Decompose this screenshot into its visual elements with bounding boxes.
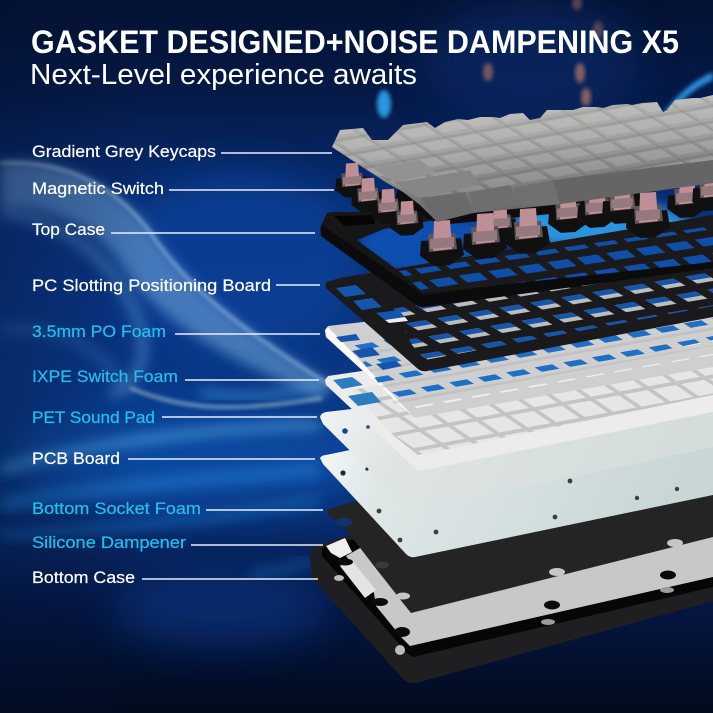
- silicone dampener: [326, 470, 713, 655]
- label: Silicone Dampener: Silicone Dampener: [32, 533, 186, 552]
- gradient grey keycaps: [332, 95, 713, 222]
- PC slotting positioning board: [325, 215, 713, 371]
- magnetic switches: [335, 163, 713, 266]
- PCB board: [320, 385, 713, 557]
- label: Magnetic Switch: Magnetic Switch: [32, 179, 164, 198]
- label: Bottom Case: Bottom Case: [32, 568, 135, 587]
- label: PET Sound Pad: PET Sound Pad: [32, 408, 155, 427]
- subtitle: Next-Level experience awaits: [30, 59, 417, 91]
- PET sound pad: [320, 350, 713, 510]
- label: 3.5mm PO Foam: 3.5mm PO Foam: [32, 322, 166, 341]
- plate corner cutouts: [336, 285, 408, 323]
- label: Bottom Socket Foam: Bottom Socket Foam: [32, 499, 201, 518]
- label: Gradient Grey Keycaps: Gradient Grey Keycaps: [32, 142, 216, 161]
- blue cutouts: IXPE foam corner: [333, 377, 381, 406]
- IXPE switch foam: [325, 310, 713, 470]
- label: IXPE Switch Foam: IXPE Switch Foam: [32, 367, 178, 386]
- exploded keyboard stack: [310, 95, 713, 683]
- title: GASKET DESIGNED+NOISE DAMPENING X5: [31, 24, 679, 60]
- label: Top Case: Top Case: [32, 220, 105, 239]
- space bar row: [373, 160, 713, 222]
- label: PC Slotting Positioning Board: PC Slotting Positioning Board: [32, 276, 271, 295]
- 3.5mm PO foam: [325, 262, 713, 417]
- label: PCB Board: PCB Board: [32, 449, 120, 468]
- top case: [320, 155, 713, 307]
- bottom socket foam: [327, 430, 713, 613]
- bottom case: [310, 470, 713, 683]
- blue cutouts: PO foam corner: [336, 334, 402, 370]
